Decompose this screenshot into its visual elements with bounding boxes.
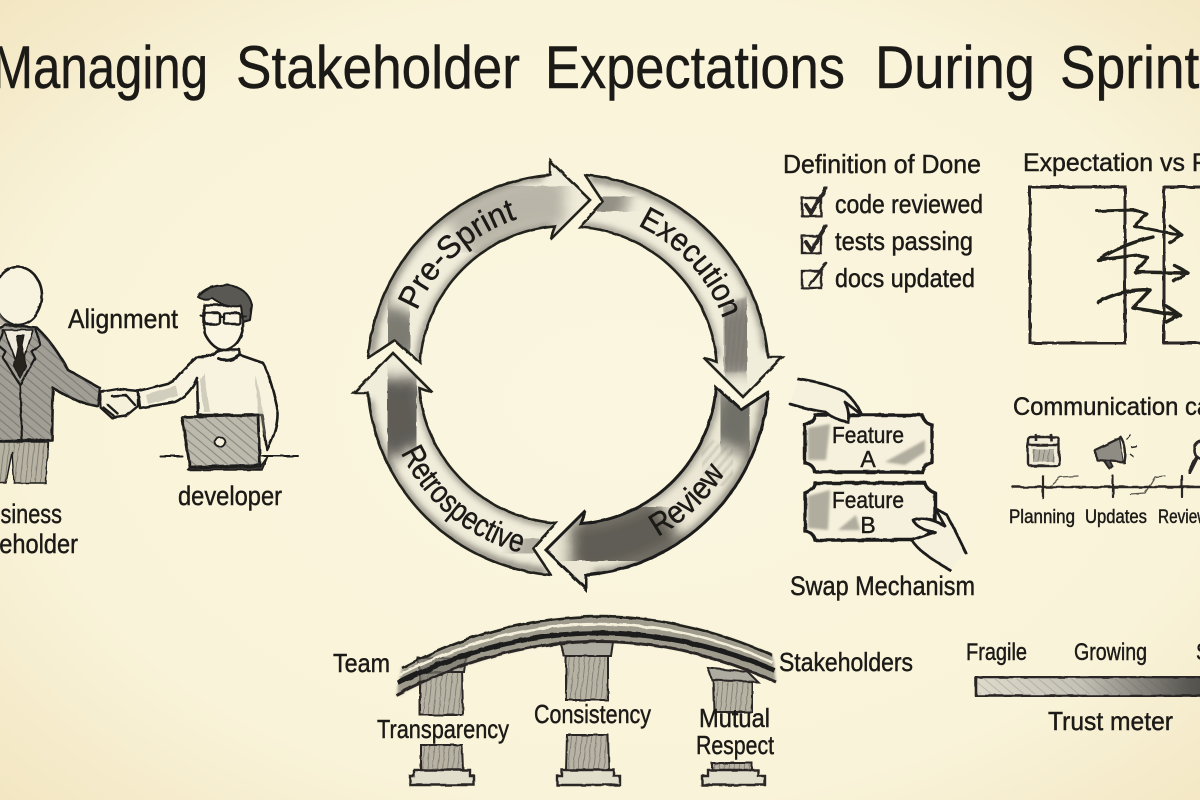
arrow: Pre-Sprint: Pre-Sprint xyxy=(398,200,517,309)
box: reality xyxy=(1164,187,1200,343)
panel: expectation vs reality xyxy=(1023,149,1200,343)
label: Transparency: Transparency xyxy=(377,714,509,744)
figure: developer with glasses xyxy=(138,285,298,470)
timeline labels: Planning xyxy=(1009,507,1075,528)
panel: definition of done xyxy=(783,149,983,293)
panel: trust meter xyxy=(966,639,1200,736)
title: Expectations xyxy=(545,34,845,101)
label: Mutual Respect: Respect xyxy=(696,730,775,760)
panel: communication cadence xyxy=(1009,393,1200,528)
arrow: Execution xyxy=(578,174,786,399)
arrow: Review: Review xyxy=(648,462,724,536)
figure: business stakeholder xyxy=(0,267,100,483)
label: Mutual Respect: Mutual xyxy=(699,703,770,733)
label: business stakeholder xyxy=(0,499,78,559)
label: Stakeholders: Stakeholders xyxy=(779,647,913,677)
title: Stakeholder xyxy=(236,34,520,101)
label: Alignment: Alignment xyxy=(68,304,178,334)
checklist item: docs updated: docs updated xyxy=(835,263,975,293)
checklist item: tests passing: tests passing xyxy=(835,226,973,256)
icon: top hand xyxy=(790,379,862,422)
pillar: Transparency xyxy=(410,658,474,785)
card: Feature A: Feature xyxy=(832,422,904,448)
icon: bottom hand xyxy=(912,508,966,570)
arrow: Execution: Execution xyxy=(640,206,738,318)
card: Feature B: B xyxy=(860,512,876,538)
timeline labels: Updates xyxy=(1085,507,1147,528)
arrow: Review xyxy=(544,384,770,593)
timeline labels xyxy=(1009,507,1200,528)
icon: megaphone xyxy=(1095,435,1137,468)
label: Mutual Respect xyxy=(696,703,775,760)
label: Consistency: Consistency xyxy=(534,699,651,729)
label: Swap Mechanism: Swap Mechanism xyxy=(790,571,975,601)
arrow: Retrospective: Retrospective xyxy=(402,444,523,552)
title: During xyxy=(875,34,1035,101)
labels: meter scale: Growing xyxy=(1074,639,1147,666)
card: Feature A: A xyxy=(860,446,876,472)
labels: meter scale xyxy=(966,639,1200,666)
checklist item: code reviewed: code reviewed xyxy=(835,189,983,219)
icon: calendar xyxy=(1028,434,1059,466)
arrows: expectation drifting to reality xyxy=(1097,210,1188,322)
card: Feature B xyxy=(805,483,935,540)
labels: meter scale: Fragile xyxy=(966,639,1027,666)
card: Feature B: Feature xyxy=(832,487,904,513)
card: Feature A xyxy=(805,415,932,472)
panel: feature swap mechanism xyxy=(790,379,975,601)
panel: bridge of trust xyxy=(333,617,913,785)
arrow: Pre-Sprint xyxy=(366,158,592,366)
label: developer: developer xyxy=(178,481,282,511)
icon: magnifier xyxy=(1190,441,1200,472)
timeline xyxy=(1013,476,1200,498)
heading: Definition of Done: Definition of Done xyxy=(783,149,981,179)
title xyxy=(0,34,1200,101)
panel: stakeholder and developer alignment xyxy=(0,267,298,559)
box: expectation xyxy=(1030,187,1125,343)
arrow: Retrospective xyxy=(350,351,558,576)
meter bar xyxy=(976,677,1200,696)
label: Team: Team xyxy=(333,648,390,678)
panel: sprint cycle ring xyxy=(350,158,786,593)
label: Trust meter: Trust meter xyxy=(1048,706,1173,736)
icon: handshake xyxy=(100,389,138,418)
pillar: Mutual Respect xyxy=(702,668,765,785)
pillar: Consistency xyxy=(557,642,620,785)
arch: bridge deck xyxy=(396,617,776,696)
